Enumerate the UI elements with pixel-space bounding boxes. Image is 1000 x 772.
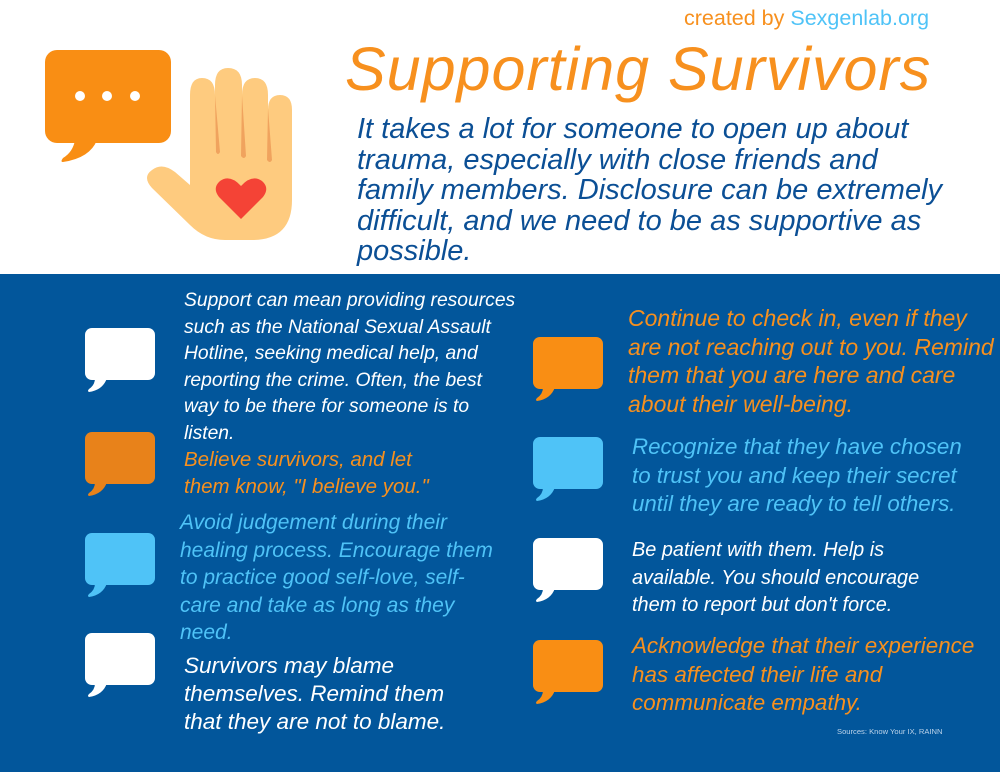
text: acknowledge <box>631 633 974 715</box>
text: believe: them know, "I believe you." <box>184 475 429 498</box>
text: blame: that they are not to blame. <box>184 709 445 734</box>
icon: speech bubble and hand <box>45 50 292 240</box>
title: Supporting Survivors <box>345 35 931 103</box>
text: acknowledge: has affected their life and <box>632 662 882 686</box>
text: resources <box>184 290 515 444</box>
intro text: possible. <box>357 235 471 267</box>
text: avoid judgement <box>179 511 493 644</box>
text: avoid judgement: care and take as long as they <box>180 594 454 616</box>
text: patient: available. You should encourage <box>632 566 919 588</box>
sources: Sources: Know Your IX, RAINN <box>837 727 943 736</box>
intro text: difficult, and we need to be as supportive as <box>357 204 921 236</box>
text: recognize: Recognize that they have chosen <box>632 434 962 459</box>
text: believe: Believe survivors, and let <box>184 448 412 471</box>
text: acknowledge: communicate empathy. <box>632 690 862 715</box>
text: resources: way to be there for someone is to <box>184 396 469 417</box>
panel: tips <box>0 274 1000 772</box>
text: blame: themselves. Remind them <box>184 681 444 706</box>
text: check in: Continue to check in, even if they <box>628 305 967 331</box>
text: check in <box>628 305 994 417</box>
text: resources: Hotline, seeking medical help, and <box>184 343 478 364</box>
text: avoid judgement: healing process. Encourage them <box>180 538 493 562</box>
text: check in: them that you are here and care <box>628 362 955 388</box>
credit line: created by Sexgenlab.org <box>684 6 929 30</box>
text: patient: them to report but don't force. <box>632 594 892 616</box>
text: resources: listen. <box>184 422 234 444</box>
text: blame: Survivors may blame <box>184 653 394 678</box>
intro text: trauma, especially with close friends and <box>357 144 878 176</box>
text: recognize: to trust you and keep their secret <box>632 462 957 488</box>
text: resources: Support can mean providing resources <box>184 290 515 311</box>
intro text <box>356 113 944 267</box>
text: acknowledge: Acknowledge that their experience <box>632 633 974 658</box>
text: avoid judgement: Avoid judgement during their <box>180 511 447 534</box>
text: believe <box>184 448 430 498</box>
text: avoid judgement: need. <box>180 621 233 644</box>
intro text: family members. Disclosure can be extremely <box>357 174 942 206</box>
text: patient: Be patient with them. Help is <box>632 539 884 561</box>
text: resources: such as the National Sexual Assault <box>184 316 491 338</box>
icon: bubbles <box>85 328 603 704</box>
text: check in: about their well-being. <box>628 391 853 417</box>
text: resources: reporting the crime. Often, the best <box>184 370 482 390</box>
intro text: It takes a lot for someone to open up about <box>357 113 908 145</box>
text: blame <box>184 653 445 734</box>
text: recognize <box>632 434 962 516</box>
text: recognize: until they are ready to tell others. <box>632 491 955 516</box>
text: check in: are not reaching out to you. Remind <box>628 334 994 360</box>
text: avoid judgement: to practice good self-love, self- <box>180 566 465 589</box>
text: patient <box>632 539 919 616</box>
